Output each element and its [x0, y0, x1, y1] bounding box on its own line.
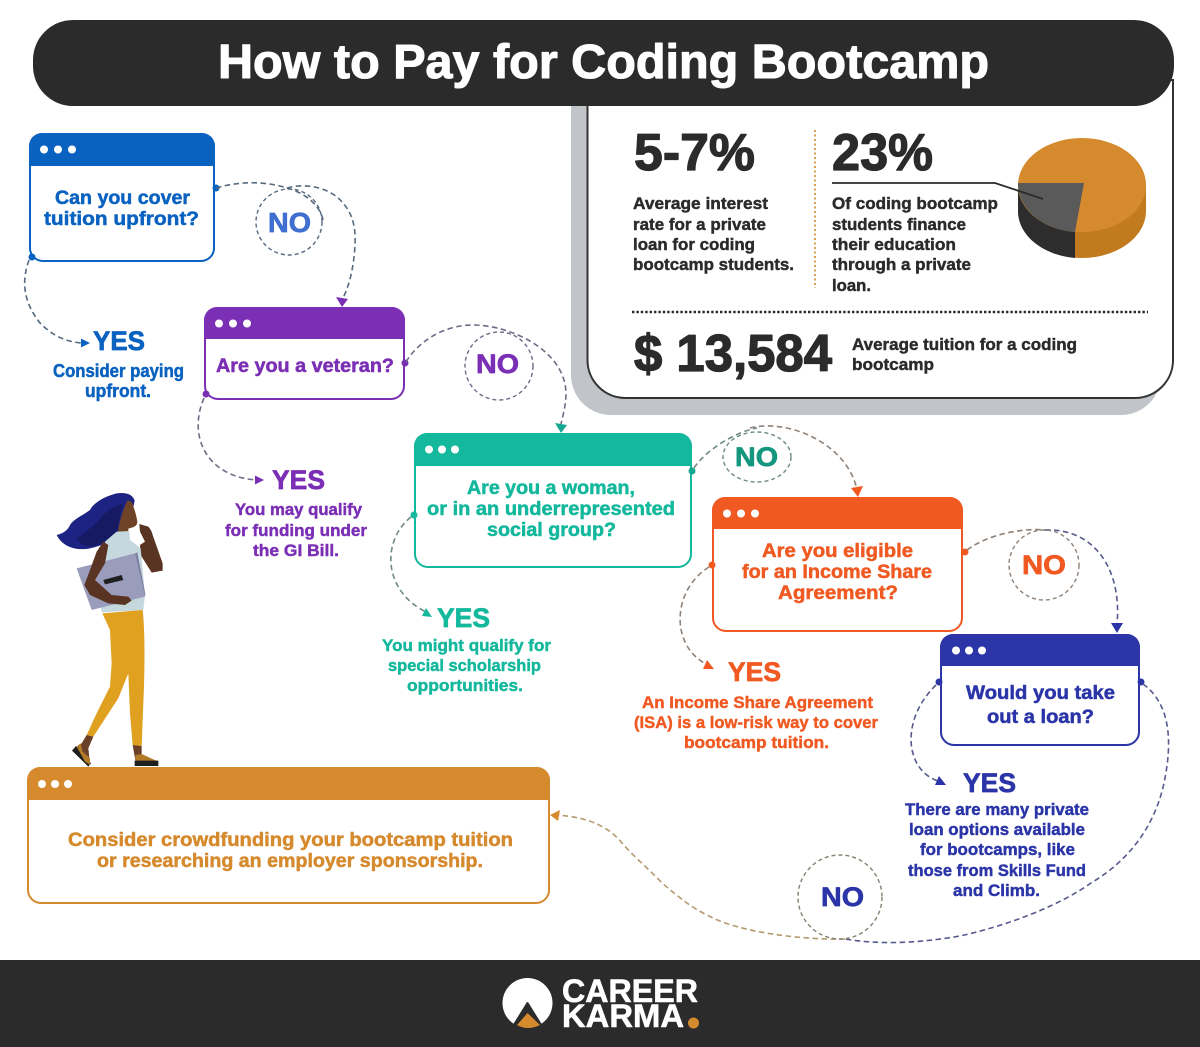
answer: yes pay upfront: YES [93, 326, 145, 356]
no badge: second [465, 332, 533, 400]
flow box: tuition upfront question: Can you cover [55, 188, 191, 209]
footer logo: KARMA [562, 998, 684, 1034]
answer: yes gi bill: the GI Bill. [253, 541, 339, 560]
answer: yes pay upfront: Consider paying [53, 361, 184, 381]
flow box: loan question: out a loan? [987, 707, 1094, 728]
answer: yes gi bill: YES [272, 465, 325, 495]
flow box: income share agreement question: Are you eligible [762, 541, 913, 562]
no badge: third: NO [735, 442, 778, 472]
flow box: income share agreement question: Agreement? [778, 583, 898, 604]
title banner: How to Pay for Coding Bootcamp [218, 36, 989, 89]
connector: fourth yes [680, 562, 716, 669]
answer: yes gi bill: You may qualify [235, 500, 363, 519]
sandals [76, 735, 93, 765]
title banner [33, 20, 1174, 106]
flow box: income share agreement question [712, 497, 963, 631]
answer: yes pay upfront: upfront. [85, 381, 151, 401]
footer logo: CAREER [562, 973, 698, 1009]
flow box: veteran question [204, 307, 405, 399]
answer: yes income share: YES [728, 657, 781, 687]
answer: yes income share [634, 657, 878, 752]
connector: fifth no [550, 678, 1169, 943]
connector: second no [402, 325, 567, 433]
no badge: third [723, 432, 791, 482]
stat: private loan share: students finance [832, 215, 966, 234]
connector: fourth no [962, 530, 1123, 633]
answer: yes scholarships: You might qualify for [382, 636, 551, 655]
stat: average tuition: $ 13,584 [634, 325, 832, 383]
answer: yes private loan: for bootcamps, like [920, 840, 1075, 859]
answer: yes scholarships [382, 603, 551, 695]
no badge: first: NO [268, 207, 311, 238]
flow box: underrepresented group question [414, 433, 692, 567]
answer: yes scholarships: opportunities. [407, 676, 523, 695]
flow box: tuition upfront question: tuition upfront? [44, 209, 199, 230]
no badge: fifth: NO [821, 882, 864, 912]
stat: private loan share [832, 124, 998, 295]
answer: yes pay upfront [53, 326, 184, 401]
stat: private loan share: 23% [832, 124, 933, 182]
connector: first yes [25, 254, 90, 348]
answer: yes gi bill: for funding under [225, 521, 367, 540]
stat: average tuition: bootcamp [852, 355, 934, 374]
flow box: crowdfunding conclusion [27, 767, 550, 903]
flow box: loan question: Would you take [966, 683, 1115, 704]
top [100, 531, 145, 612]
pie chart: 23 percent [1018, 138, 1146, 258]
answer: yes income share: An Income Share Agreement [642, 693, 873, 712]
footer [0, 960, 1200, 1047]
answer: yes private loan: YES [963, 768, 1016, 798]
stat: interest rate: loan for coding [633, 235, 755, 254]
connector: first no [212, 183, 355, 307]
raised arm [139, 524, 163, 573]
no badge: fourth [1009, 530, 1079, 600]
flow box: veteran question: Are you a veteran? [216, 356, 394, 377]
trousers [87, 610, 144, 746]
connector: third no [688, 426, 863, 497]
no badge: fifth [798, 855, 882, 939]
neck and face [117, 501, 137, 535]
no badge: first [256, 189, 322, 255]
flow box: crowdfunding conclusion: or researching an employer sponsorship. [97, 851, 483, 872]
flow box: tuition upfront question [29, 133, 215, 261]
answer: yes income share: (ISA) is a low-risk way to cover [634, 713, 878, 732]
flow box: income share agreement question: for an Income Share [742, 562, 932, 583]
stat: interest rate: bootcamp students. [633, 255, 794, 274]
answer: yes scholarships: special scholarship [388, 656, 541, 675]
answer: yes gi bill [225, 465, 367, 560]
stat: private loan share: loan. [832, 276, 871, 295]
stat: private loan share: Of coding bootcamp [832, 194, 998, 213]
connector: fifth yes [911, 678, 946, 785]
answer: yes income share: bootcamp tuition. [684, 733, 829, 752]
stat: private loan share: their education [832, 235, 956, 254]
hair [57, 493, 135, 549]
illustration: woman carrying laptop [57, 493, 163, 767]
stat: interest rate: Average interest [633, 194, 768, 213]
footer logo [502, 973, 699, 1034]
no badge: fourth: NO [1022, 550, 1066, 580]
stat: interest rate: rate for a private [633, 215, 766, 234]
flow box: crowdfunding conclusion: Consider crowdfunding your bootcamp tuition [68, 830, 513, 851]
front arm [84, 542, 132, 605]
stat: average tuition: Average tuition for a coding [852, 335, 1077, 354]
answer: yes private loan: loan options available [909, 820, 1085, 839]
answer: yes private loan: There are many private [905, 800, 1089, 819]
answer: yes private loan: and Climb. [953, 881, 1040, 900]
connector: third yes [391, 512, 432, 617]
answer: yes private loan: those from Skills Fund [908, 861, 1086, 880]
laptop sticker [103, 575, 123, 584]
connector: second yes [198, 390, 264, 484]
stat: interest rate: 5-7% [634, 124, 755, 182]
stat: interest rate [633, 124, 794, 274]
answer: yes private loan [905, 768, 1089, 900]
flow box: loan question [940, 634, 1140, 745]
flow box: underrepresented group question: or in an underrepresented [427, 499, 675, 520]
panel: statistics [571, 80, 1173, 415]
laptop [77, 553, 145, 610]
stat: average tuition [634, 325, 1077, 383]
flow box: underrepresented group question: social group? [487, 520, 616, 541]
flow box: underrepresented group question: Are you a woman, [467, 478, 635, 499]
answer: yes scholarships: YES [437, 603, 490, 633]
no badge: second: NO [476, 349, 519, 379]
stat: private loan share: through a private [832, 255, 971, 274]
